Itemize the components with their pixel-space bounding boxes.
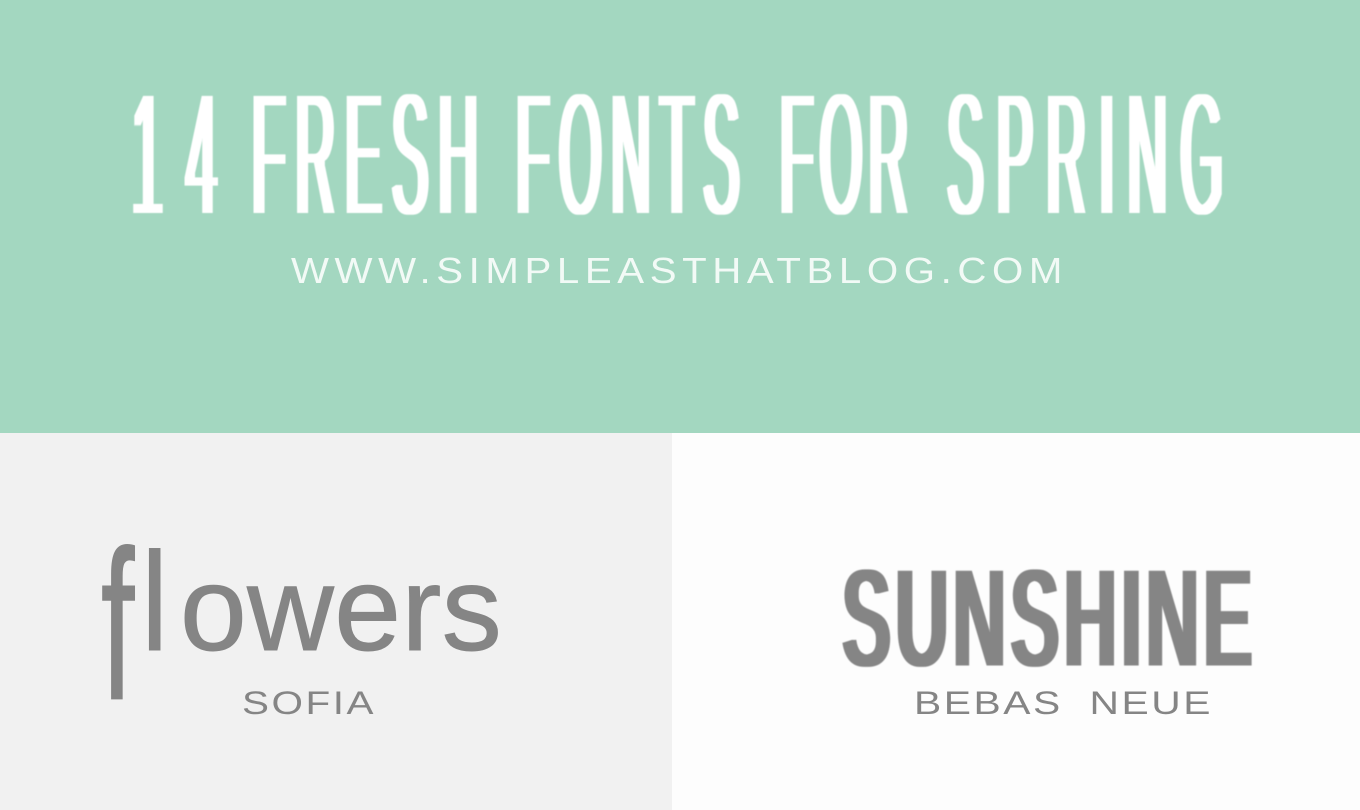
title: 14	[132, 56, 280, 253]
font sample word: sunshine: SUNSHINE	[842, 539, 1257, 697]
font name: sofia: SOFIA	[242, 685, 376, 721]
title: FONTS	[516, 56, 774, 253]
font sample word: flowers: l	[141, 524, 168, 681]
title: SPRING	[947, 56, 1236, 253]
title: FRESH	[252, 56, 513, 253]
font sample word: flowers: owers	[180, 542, 502, 676]
title	[132, 56, 1236, 253]
font sample word: flowers	[0, 433, 672, 810]
panel: bebas neue font sample	[672, 433, 1360, 810]
panel: sofia font sample	[0, 433, 672, 810]
font name: bebas neue: BEBAS NEUE	[914, 685, 1213, 721]
panel: header	[0, 0, 1360, 433]
website url: WWW.SIMPLEASTHATBLOG.COM	[291, 250, 1068, 291]
font sample word: flowers: f	[101, 508, 134, 745]
title: FOR	[780, 56, 936, 253]
